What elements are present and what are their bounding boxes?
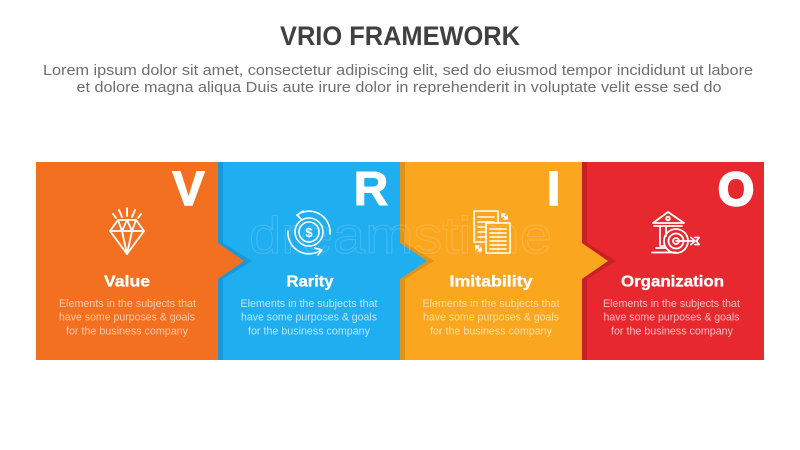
heading: Rarity: Rarity xyxy=(286,274,334,290)
heading: Value: Value xyxy=(104,274,150,290)
body text: Organization: for the business company xyxy=(611,326,733,338)
body text: Value xyxy=(59,298,196,338)
letter O: O xyxy=(718,163,754,215)
body text: Imitability: for the business company xyxy=(430,326,552,338)
watermark: dreamstime xyxy=(249,207,552,265)
heading: Organization: Organization xyxy=(621,274,724,290)
body text: Organization: have some purposes & goals xyxy=(604,312,740,324)
panel: rarity xyxy=(218,162,434,360)
arrow shadow on blue xyxy=(218,162,252,360)
body text: Imitability: Elements in the subjects that xyxy=(422,298,560,310)
body text: Imitability: have some purposes & goals xyxy=(423,312,559,324)
letter R: R xyxy=(354,163,388,216)
title: VRIO FRAMEWORK xyxy=(280,21,520,51)
body text: Rarity: have some purposes & goals xyxy=(241,312,377,324)
arrow shadow on red xyxy=(582,162,616,360)
icon: documents xyxy=(474,211,510,253)
subtitle text block xyxy=(43,62,753,96)
arrow shadow on yellow xyxy=(400,162,434,360)
subtitle text block: Lorem ipsum dolor sit amet, consectetur adipiscing elit, sed do eiusmod tempor incididunt ut labore xyxy=(43,62,753,79)
letter I: I xyxy=(547,163,560,216)
body text: Imitability xyxy=(422,298,560,338)
body text: Organization xyxy=(603,298,740,338)
letter V: V xyxy=(172,163,205,216)
body text: Value: Elements in the subjects that xyxy=(59,298,196,310)
icon: dollar coin with cycle arrows: $ xyxy=(305,225,313,240)
icon: diamond xyxy=(110,208,144,254)
subtitle text block: et dolore magna aliqua Duis aute irure dolor in reprehenderit in voluptate velit esse sed do xyxy=(76,79,722,96)
icon: bank and target xyxy=(652,212,699,253)
body text: Value: for the business company xyxy=(66,326,188,338)
body text: Rarity: for the business company xyxy=(248,326,370,338)
panel: imitability xyxy=(400,162,616,360)
body text: Organization: Elements in the subjects that xyxy=(603,298,740,310)
body text: Rarity xyxy=(240,298,378,338)
heading: Imitability: Imitability xyxy=(450,274,533,290)
panel: organization xyxy=(582,162,764,360)
panel: value xyxy=(36,162,252,360)
icon: dollar coin with cycle arrows xyxy=(288,211,330,255)
body text: Rarity: Elements in the subjects that xyxy=(240,298,378,310)
body text: Value: have some purposes & goals xyxy=(59,312,195,324)
